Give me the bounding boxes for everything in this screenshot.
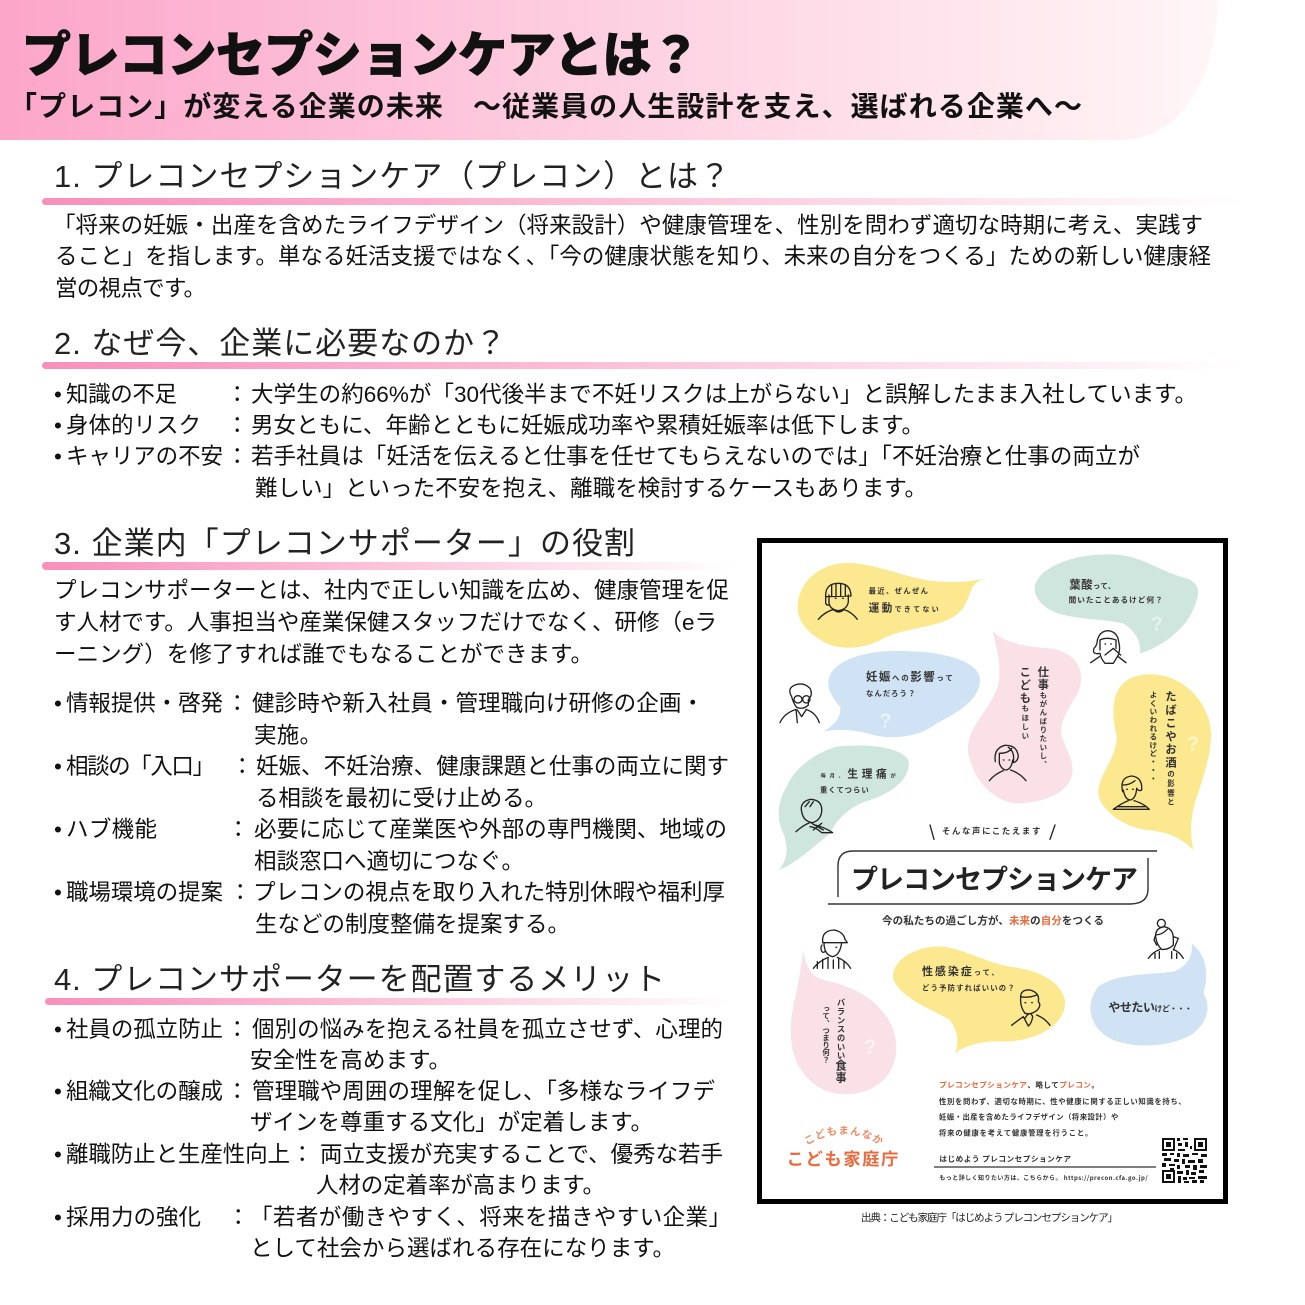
section 2: キャリアの不安: [66, 444, 223, 469]
section 2: ：: [226, 413, 249, 438]
tagline: answering voices: [930, 825, 1055, 839]
section 4: 採用力の強化: [66, 1205, 201, 1230]
bubble: exercise: 最近、ぜんぜん: [869, 585, 929, 596]
section 3: ーニング）を修了すれば誰でもなることができます。: [54, 642, 593, 667]
bubble: pregnancy: [780, 651, 980, 737]
section 2: [42, 326, 1245, 501]
bubble: balanced meal: バランスのいい 食事: [833, 998, 849, 1084]
section 4: ザインを尊重する文化」が定着します。: [250, 1110, 653, 1135]
section 3: 職場環境の提案: [66, 880, 223, 905]
section 4: 「若者が働きやすく、将来を描きやすい企業」: [250, 1205, 731, 1230]
bubble: pregnancy: ?: [879, 710, 892, 732]
section 3: ：: [229, 880, 252, 905]
section 2: 若手社員は「妊活を伝えると仕事を任せてもらえないのでは」「不妊治療と仕事の両立が: [251, 444, 1140, 469]
poster title box: プレコンセプションケア: [851, 858, 1138, 897]
bubble: folic acid: ?: [1151, 614, 1163, 636]
bubble: period pain: 毎月、生理痛が: [821, 766, 896, 781]
bubble: work and children: 仕事 もがんばりたいし、: [1035, 665, 1051, 768]
section 3: 実施。: [254, 723, 322, 748]
section 3: ：: [227, 817, 250, 842]
QR code: [1162, 1138, 1207, 1183]
bubble: STI prevention: 性感染症って、: [922, 963, 999, 979]
section 4: •: [54, 1205, 62, 1230]
section 2: 大学生の約66%が「30代後半まで不妊リスクは上がらない」と誤解したまま入社しています。: [251, 382, 1197, 407]
poster tagline: future self: 今の私たちの過ごし方が、未来の自分をつくる: [882, 913, 1104, 928]
section 1: 営の視点です。: [55, 276, 206, 301]
section 3: ：: [231, 754, 254, 779]
poster lower speech bubbles: [787, 918, 1208, 1182]
section 4: ：: [226, 1079, 249, 1104]
section 3: る相談を最初に受け止める。: [256, 786, 547, 811]
section 3: 妊娠、不妊治療、健康課題と仕事の両立に関す: [256, 754, 729, 779]
section 3: 情報提供・啓発: [66, 691, 223, 716]
section 3: ：: [226, 691, 249, 716]
section 4: 社員の孤立防止: [66, 1017, 223, 1042]
section 4: •: [54, 1079, 62, 1104]
poster: [757, 538, 1228, 1204]
bubble: period pain: 重くてつらい: [820, 784, 869, 795]
bubble: work and children: [968, 631, 1081, 803]
section 2: •: [54, 444, 62, 469]
bubble: pregnancy: 妊娠への影響って: [866, 669, 953, 685]
bubble: lose weight: [1090, 919, 1207, 1045]
section 2: ：: [226, 444, 249, 469]
logo: children and families agency: [787, 1126, 898, 1170]
section 4: 安全性を高めます。: [250, 1048, 451, 1073]
poster description: [934, 1079, 1186, 1182]
section 4: として社会から選ばれる存在になります。: [250, 1236, 675, 1261]
poster description: 妊娠・出産を含めたライフデザイン（将来設計）や: [939, 1111, 1118, 1122]
bubble: work and children: こども もほしい: [1017, 666, 1033, 739]
section 4: [45, 962, 735, 1261]
section 1: ること」を指します。単なる妊活支援ではなく、「今の健康状態を知り、未来の自分をつくる」ための新しい健康経: [55, 244, 1211, 269]
section 4: ：: [227, 1205, 250, 1230]
section 4: 離職防止と生産性向上: [66, 1142, 290, 1167]
bubble: tobacco and alcohol: [1098, 674, 1211, 850]
section 3: 健診時や新入社員・管理職向け研修の企画・: [252, 691, 704, 716]
heading 1: 1. プレコンセプションケア（プレコン）とは？: [54, 159, 730, 194]
bubble: tobacco and alcohol: よくいわれるけど・・・: [1148, 690, 1159, 782]
header banner: [0, 0, 1218, 140]
bubble: tobacco and alcohol: ?: [1187, 733, 1199, 756]
bubble: pregnancy: なんだろう？: [866, 688, 915, 699]
section 2: •: [54, 413, 62, 438]
poster description: はじめよう プレコンセプションケア: [939, 1153, 1071, 1164]
bubble: exercise: [798, 563, 987, 648]
section 4: •: [54, 1142, 62, 1167]
poster description: 性別を問わず、適切な時期に、性や健康に関する正しい知識を持ち、: [939, 1096, 1186, 1107]
section 2: 男女ともに、年齢とともに妊娠成功率や累積妊娠率は低下します。: [251, 413, 924, 438]
poster upper speech bubbles: [778, 554, 1211, 870]
bubble: balanced meal: [791, 930, 896, 1094]
section 3: 生などの制度整備を提案する。: [255, 912, 570, 937]
section 3: プレコンサポーターとは、社内で正しい知識を広め、健康管理を促: [54, 578, 729, 603]
section 4: ：: [291, 1142, 314, 1167]
section 4: 人材の定着率が高まります。: [316, 1173, 605, 1198]
bubble: exercise: 運動できてない: [869, 601, 939, 616]
poster description: プレコンセプションケア、略してプレコン。: [939, 1079, 1099, 1090]
bubble: tobacco and alcohol: たばこや お酒 の影響と: [1163, 691, 1179, 806]
poster title box: [828, 851, 1157, 904]
section 3: •: [54, 817, 62, 842]
section 4: 個別の悩みを抱える社員を孤立させず、心理的: [252, 1017, 723, 1042]
heading 4: 4. プレコンサポーターを配置するメリット: [54, 962, 665, 997]
section 3: •: [54, 691, 62, 716]
section 1: 「将来の妊娠・出産を含めたライフデザイン（将来設計）や健康管理を、性別を問わず適切な時期に考え、実践す: [53, 213, 1203, 238]
logo: children and families agency: こども家庭庁: [787, 1145, 898, 1170]
section 3: ハブ機能: [66, 817, 157, 842]
heading 3: 3. 企業内「プレコンサポーター」の役割: [54, 526, 635, 561]
section 2: 身体的リスク: [66, 413, 201, 438]
bubble: STI prevention: どう予防すればいいの？: [922, 983, 1015, 994]
tagline: answering voices: そんな声にこたえます: [942, 825, 1040, 837]
title: プレコンセプションケアとは？: [22, 16, 700, 87]
logo: children and families agency: こどもまんなか: [805, 1126, 882, 1144]
bubble: folic acid: 聞いたことあるけど何？: [1069, 595, 1163, 606]
section 4: 組織文化の醸成: [66, 1079, 223, 1104]
section 4: 両立支援が充実することで、優秀な若手: [320, 1142, 723, 1167]
bubble: STI prevention: [893, 947, 1065, 1053]
section 3: 相談の「入口」: [66, 754, 215, 779]
poster description: もっと詳しく知りたい方は、こちらから。 https://precon.cfa.go.jp/: [939, 1173, 1148, 1182]
section 1: [42, 159, 1245, 301]
bubble: balanced meal: って、つまり何？: [820, 1005, 831, 1063]
bubble: lose weight: やせたいけど・・・: [1108, 998, 1192, 1015]
bubble: folic acid: 葉酸って、: [1069, 576, 1115, 592]
bubble: period pain: [778, 745, 909, 870]
bubble: balanced meal: ?: [864, 1036, 876, 1058]
section 3: [42, 526, 735, 937]
section 4: •: [54, 1017, 62, 1042]
section 4: ：: [226, 1017, 249, 1042]
section 3: 相談窓口へ適切につなぐ。: [254, 849, 524, 874]
section 3: プレコンの視点を取り入れた特別休暇や福利厚: [253, 880, 725, 905]
section 4: 管理職や周囲の理解を促し、「多様なライフデ: [252, 1079, 715, 1104]
section 3: •: [54, 880, 62, 905]
section 3: す人材です。人事担当や産業保健スタッフだけでなく、研修（eラ: [54, 610, 717, 635]
section 2: •: [54, 382, 62, 407]
heading 2: 2. なぜ今、企業に必要なのか？: [54, 326, 506, 361]
section 3: 必要に応じて産業医や外部の専門機関、地域の: [254, 817, 727, 842]
subtitle: 「プレコン」が変える企業の未来 ～従業員の人生設計を支え、選ばれる企業へ～: [9, 85, 1082, 125]
section 3: •: [54, 754, 62, 779]
source caption: 出典：こども家庭庁「はじめよう プレコンセプションケア」: [861, 1210, 1118, 1225]
section 2: 難しい」といった不安を抱え、離職を検討するケースもあります。: [255, 476, 927, 501]
bubble: folic acid: [1035, 554, 1198, 663]
poster description: 将来の健康を考えて健康管理を行うこと。: [939, 1128, 1092, 1139]
section 2: 知識の不足: [66, 382, 177, 407]
section 2: ：: [226, 382, 249, 407]
